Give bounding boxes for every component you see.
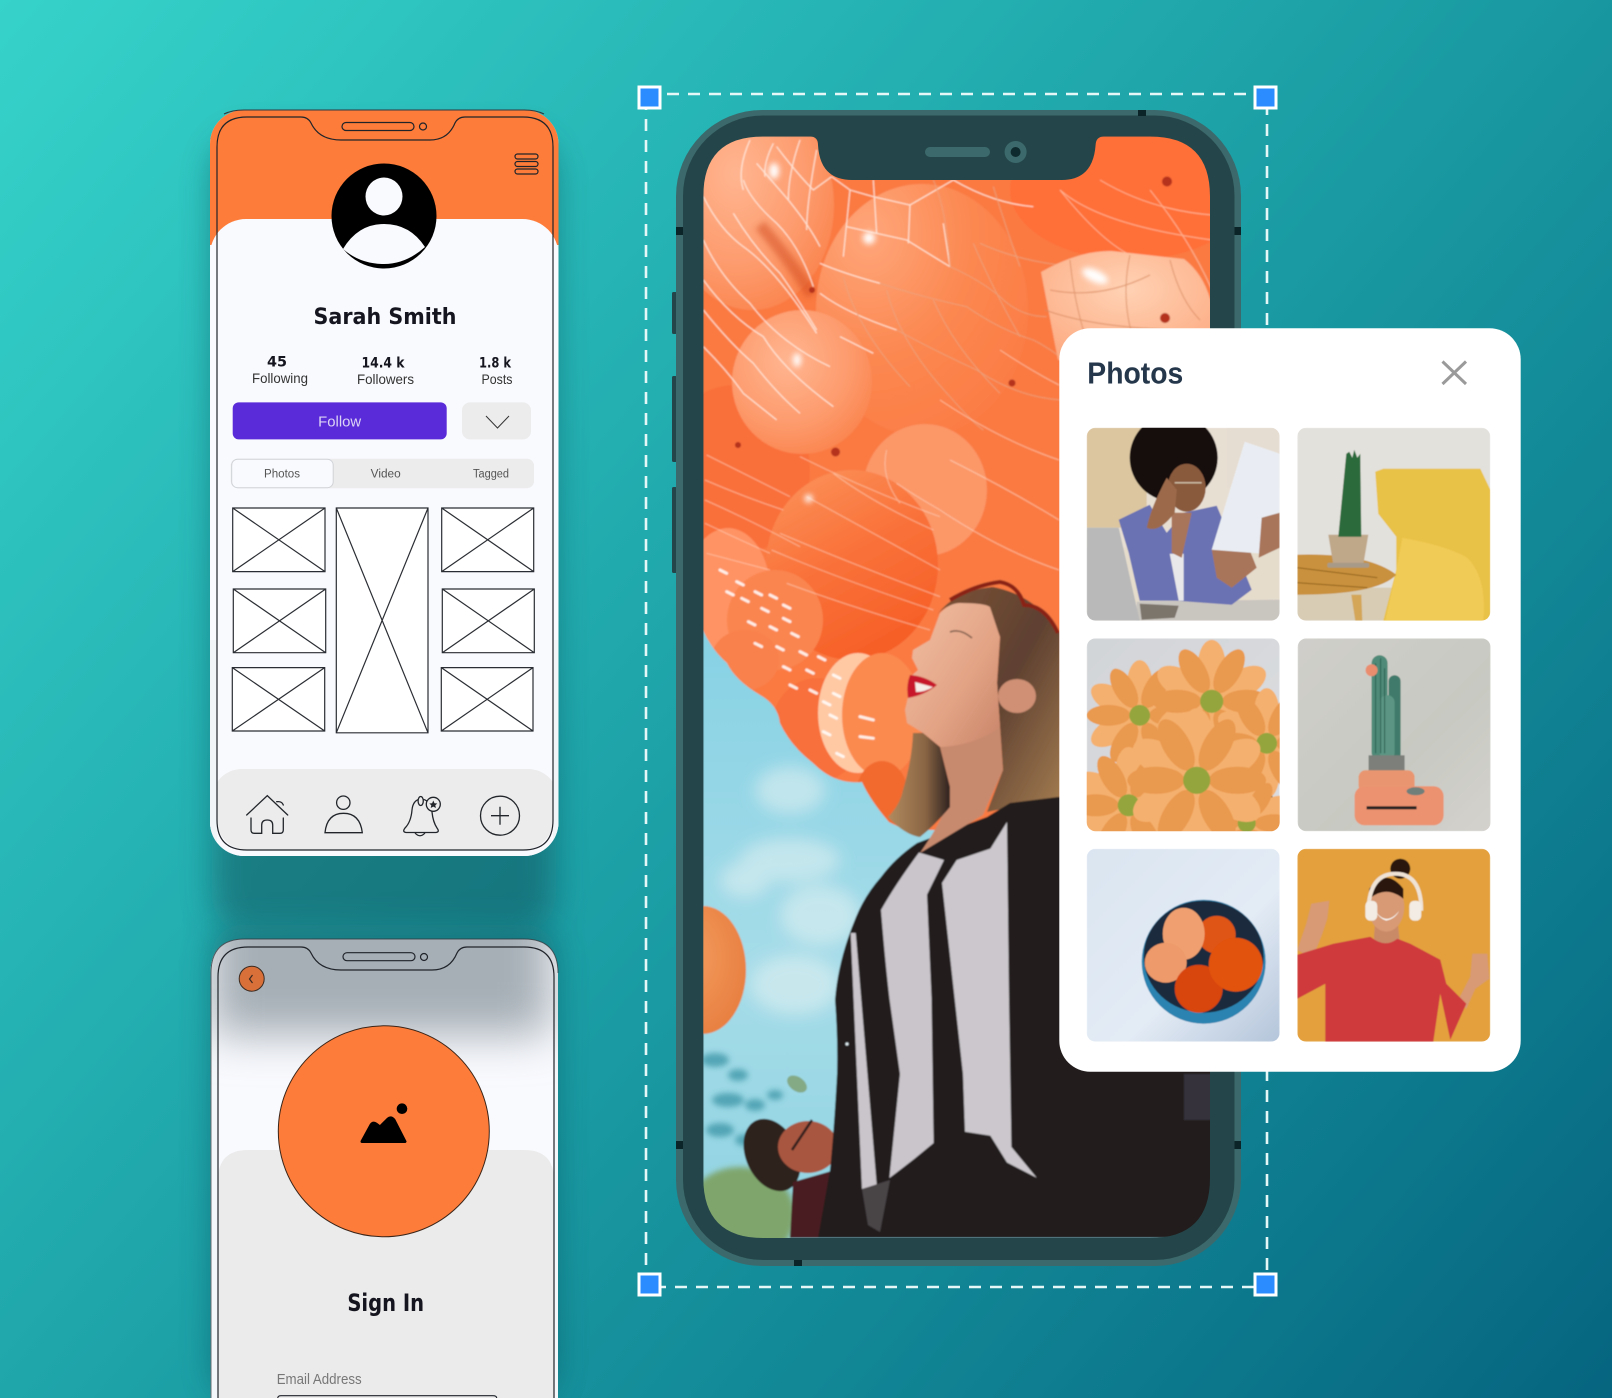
bottom navigation panel [218,769,552,850]
lips [907,675,937,698]
bushes [703,1163,794,1238]
tabs: Tagged [473,468,509,480]
mid left balloon [732,310,872,454]
antenna bands [676,110,1241,1266]
speaker and camera [342,122,426,130]
tabs: Video [371,468,401,480]
handle: top left [639,87,660,108]
name: Sarah Smith [314,305,456,330]
jacket hem shading [862,1180,890,1232]
photo: bowl of tangerines [1087,849,1280,1042]
side buttons [672,292,677,573]
woman jacket [818,790,1212,1238]
orange circle [278,1026,489,1237]
ear [998,679,1036,713]
back button [239,966,264,991]
icon: image placeholder [362,1103,407,1142]
card title: Photos [1087,356,1183,390]
eye [950,631,972,638]
net lines lower balloons [705,450,940,630]
white dashes on near netting [720,570,873,757]
phone body [210,110,558,856]
wireframe phone: profile screen [210,110,559,879]
centre lower balloon [863,424,987,556]
handle: top right [1255,87,1276,108]
dashed frame [646,94,1267,1287]
email input top edge [278,1396,497,1398]
upper left balloon [703,136,834,310]
icon: person [325,796,362,833]
hair left lock [888,733,950,837]
face [905,603,1000,747]
follow button [233,402,447,439]
top right balloon [1010,136,1210,256]
shirt second panel [942,822,1037,1178]
stats: 1.8 k [479,356,512,372]
sign in gray panel [218,1150,554,1398]
jacket highlight [1184,1074,1212,1120]
leaf [786,1074,808,1094]
photo: orange flowers [1072,638,1321,871]
stats: 14.4 k [362,356,405,372]
photo on screen: woman with orange balloons [703,136,1210,1238]
clouds [720,766,860,1015]
stats: Posts [482,371,512,387]
leaves [701,1053,783,1146]
net lines right side [940,180,1212,570]
orange header and white body [210,110,559,879]
menu icon [515,154,538,174]
outer edge line [211,939,558,1398]
sky [703,630,1166,1238]
balloon knots [735,176,1172,456]
man in background [742,1118,834,1238]
phone outline and notch [218,947,554,1398]
lower left netted balloons [703,528,768,648]
teeth [915,682,933,692]
main phone mockup [660,100,1250,1266]
thin net lines across big balloon [843,180,1060,430]
icon: home [247,796,288,833]
stats: 45 [267,354,287,370]
phone bezel [683,116,1234,1260]
phone shadows [212,135,556,1398]
shirt left strip [851,933,877,1189]
shirt collar area and neck [920,727,1004,853]
pale balloon netting [1045,254,1200,330]
photo: woman with laptop [1087,414,1280,621]
hair red wisps [950,582,1058,633]
email label: Email Address [277,1372,362,1388]
phone body with gray top [210,939,558,1398]
handle: bottom right [1255,1274,1276,1295]
phone outline and notch [217,117,553,850]
follow button: Follow [318,414,362,430]
top edge line [224,110,544,114]
stats [252,354,512,387]
dropdown button [462,402,531,439]
balloon cluster [703,136,1210,831]
handle: bottom left [639,1274,660,1295]
speaker and camera [343,953,428,961]
card background [1059,328,1521,1072]
tabs [231,459,534,488]
sparkle [846,1042,848,1046]
pale balloon [1041,251,1212,360]
white net lines upper left [703,140,1033,420]
avatar [332,164,436,268]
stats: Followers [357,371,414,387]
close icon [1442,362,1466,384]
crease shadow [760,225,812,295]
selection outline [639,87,1276,1295]
phone frame [676,110,1241,1266]
balloon in sky [703,905,747,1035]
photo: cactus on camera [1298,638,1491,831]
wireframe phone: sign in screen [210,938,558,1398]
icon: bell [404,796,440,836]
large lower balloon [766,470,938,660]
left shaded balloon [704,386,810,548]
image placeholders [232,508,534,733]
photo: cactus and yellow chair [1297,428,1490,621]
photos card [1059,328,1521,1072]
woman hair back [937,587,1060,812]
large centre balloon [816,184,1016,408]
notch camera [1005,141,1027,163]
shirt main panel [881,852,944,1178]
balloon highlights [769,163,1110,502]
tabs: Photos [264,468,300,480]
notch speaker [925,147,990,157]
stats: Following [252,370,308,386]
photo: woman with headphones [1297,849,1490,1042]
sign in heading: Sign In [347,1289,424,1317]
icon: plus [480,796,520,835]
